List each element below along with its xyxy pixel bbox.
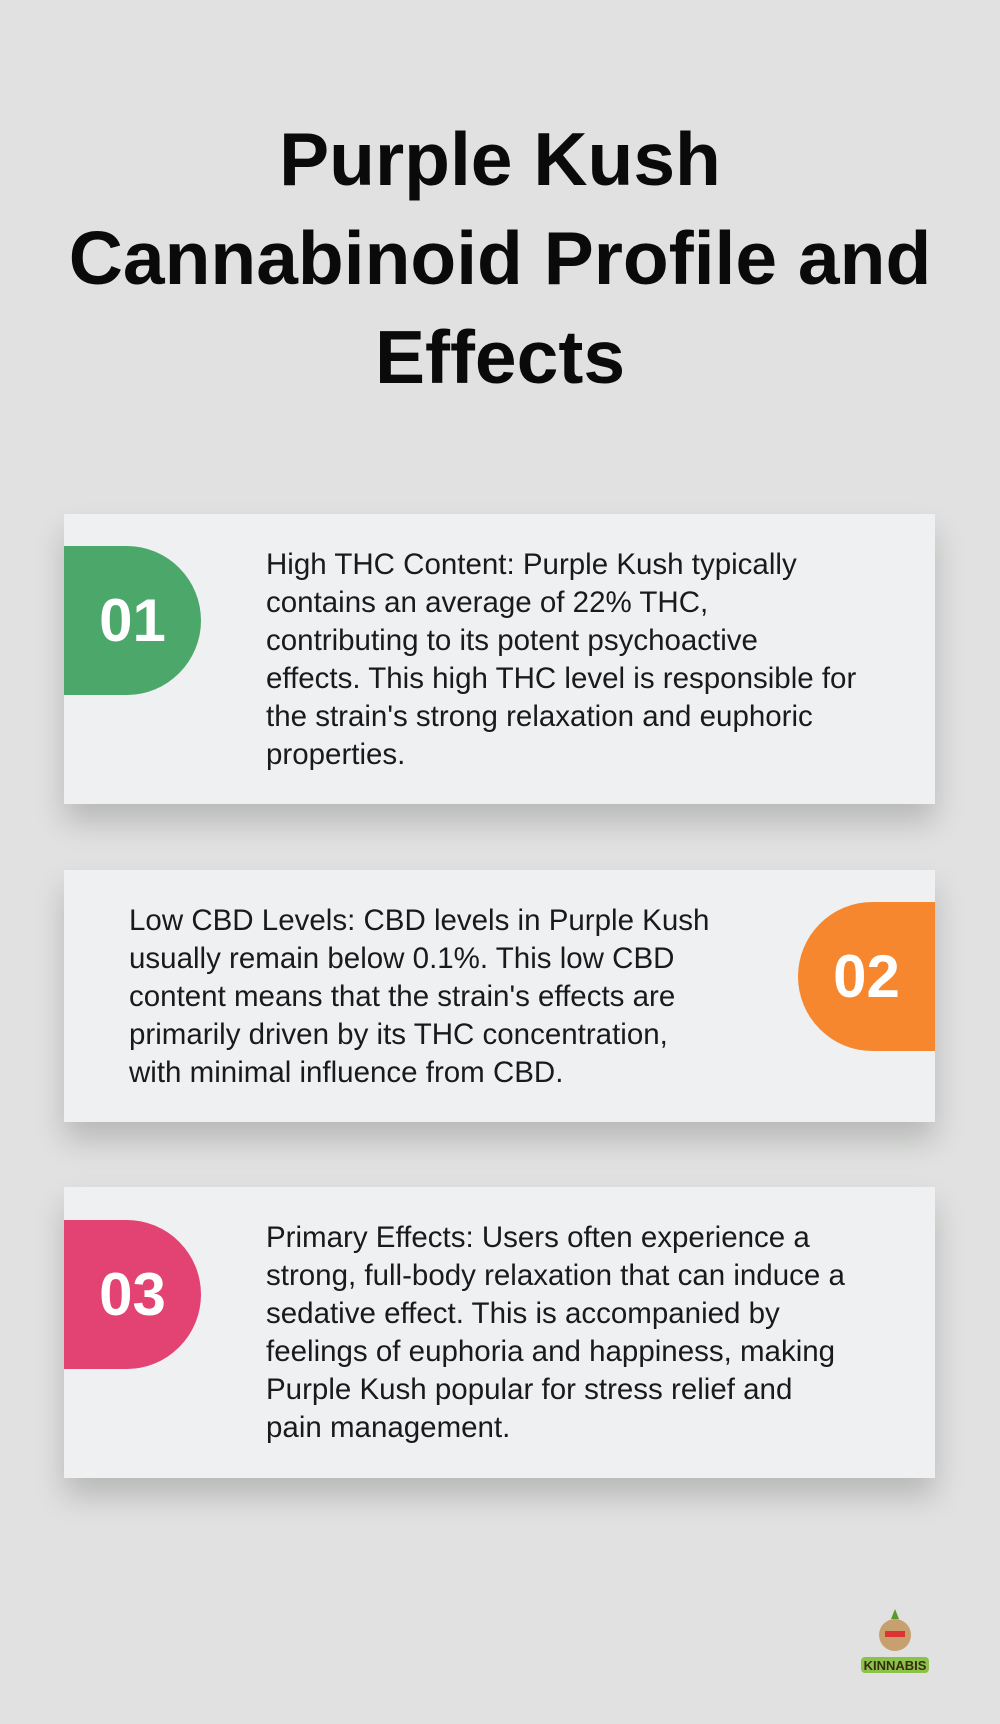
- text 3: [266, 1221, 845, 1444]
- text 3: pain management.: [266, 1411, 510, 1444]
- text 3: Purple Kush popular for stress relief and: [266, 1373, 792, 1406]
- text 2: primarily driven by its THC concentration,: [129, 1018, 668, 1051]
- logo: [861, 1609, 929, 1673]
- text 1: contains an average of 22% THC,: [266, 586, 708, 619]
- title: Cannabinoid Profile and: [69, 216, 931, 300]
- badge 03: 03: [99, 1261, 166, 1328]
- text 1: [266, 548, 856, 771]
- title: Purple Kush: [279, 117, 721, 201]
- text 3: Primary Effects: Users often experience a: [266, 1221, 810, 1254]
- text 1: the strain's strong relaxation and euphoric: [266, 700, 813, 733]
- title: [69, 117, 931, 399]
- text 2: Low CBD Levels: CBD levels in Purple Kush: [129, 904, 709, 937]
- badge 02: [798, 902, 935, 1051]
- text 3: sedative effect. This is accompanied by: [266, 1297, 780, 1330]
- text 3: feelings of euphoria and happiness, making: [266, 1335, 835, 1368]
- badge 02: 02: [833, 943, 900, 1010]
- text 1: High THC Content: Purple Kush typically: [266, 548, 797, 581]
- badge 01: [64, 546, 201, 695]
- panel: card 2: [64, 870, 935, 1122]
- text 1: properties.: [266, 738, 405, 771]
- text 2: content means that the strain's effects are: [129, 980, 675, 1013]
- badge 01: 01: [99, 587, 166, 654]
- title: Effects: [375, 315, 625, 399]
- text 3: strong, full-body relaxation that can induce a: [266, 1259, 845, 1292]
- logo: KINNABIS: [864, 1658, 927, 1673]
- badge 03: [64, 1220, 201, 1369]
- text 1: contributing to its potent psychoactive: [266, 624, 758, 657]
- panel: card 1: [64, 514, 935, 804]
- text 1: effects. This high THC level is responsible for: [266, 662, 856, 695]
- text 2: usually remain below 0.1%. This low CBD: [129, 942, 674, 975]
- text 2: with minimal influence from CBD.: [129, 1056, 563, 1089]
- panel: card 3: [64, 1187, 935, 1478]
- text 2: [129, 904, 709, 1089]
